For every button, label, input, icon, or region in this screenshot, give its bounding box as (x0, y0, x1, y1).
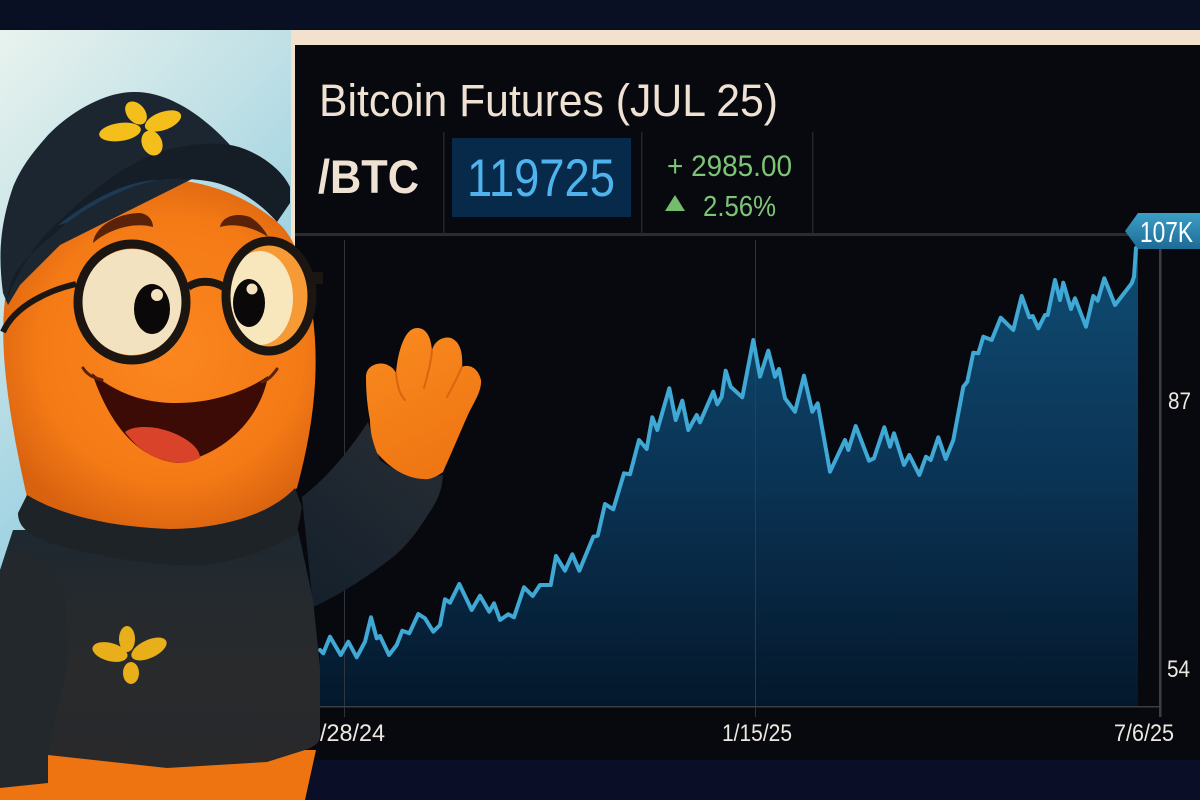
mascot: lower body (0, 750, 316, 800)
mascot: left eye (82, 249, 182, 355)
mascot: smile (83, 368, 277, 463)
icon: up triangle (665, 195, 685, 211)
background: bottom band (295, 760, 1200, 800)
panel frame: cream border (291, 30, 1200, 800)
y axis label: 54: 54 (1167, 656, 1190, 683)
title: Bitcoin Futures (JUL 25) (319, 75, 778, 126)
x axis label: middle date: 1/15/25 (722, 720, 792, 747)
mascot: torso sweater (0, 530, 320, 768)
mascot: waving hand (366, 328, 481, 479)
x axis label: start date: /28/24 (320, 720, 385, 747)
panel: chart terminal (295, 45, 1200, 760)
mascot: right eye (226, 241, 312, 351)
mascot: head (3, 180, 316, 532)
background: sky panel (0, 30, 292, 800)
mascot: left eyebrow (93, 213, 153, 243)
price box: 119725 (467, 149, 615, 208)
area chart (295, 240, 1162, 717)
background: top band (0, 0, 1200, 28)
mascot: raised arm (302, 422, 443, 607)
mascot: cap (0, 92, 290, 305)
mascot character (0, 92, 481, 800)
price change: + 2985.00 (667, 150, 792, 183)
y axis label: 87: 87 (1168, 388, 1191, 415)
mascot: sleeve (0, 552, 68, 788)
percent change: 2.56% (703, 191, 776, 223)
icon: sweater flower logo (90, 626, 170, 684)
ticker symbol: /BTC (318, 150, 419, 203)
icon: cap flower logo (98, 97, 184, 159)
mascot: right eyebrow (220, 215, 268, 237)
mascot: sweater collar (18, 488, 302, 565)
x axis label: end date: 7/6/25 (1114, 720, 1174, 747)
price box (452, 138, 631, 217)
mascot: glasses (3, 241, 323, 360)
